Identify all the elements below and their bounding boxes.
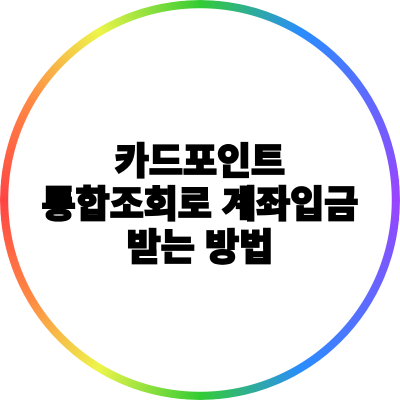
title: [42, 130, 358, 271]
title: 받는 방법: [127, 217, 273, 271]
title: 카드포인트: [115, 130, 285, 184]
title: 통합조회로 계좌입금: [42, 174, 358, 228]
